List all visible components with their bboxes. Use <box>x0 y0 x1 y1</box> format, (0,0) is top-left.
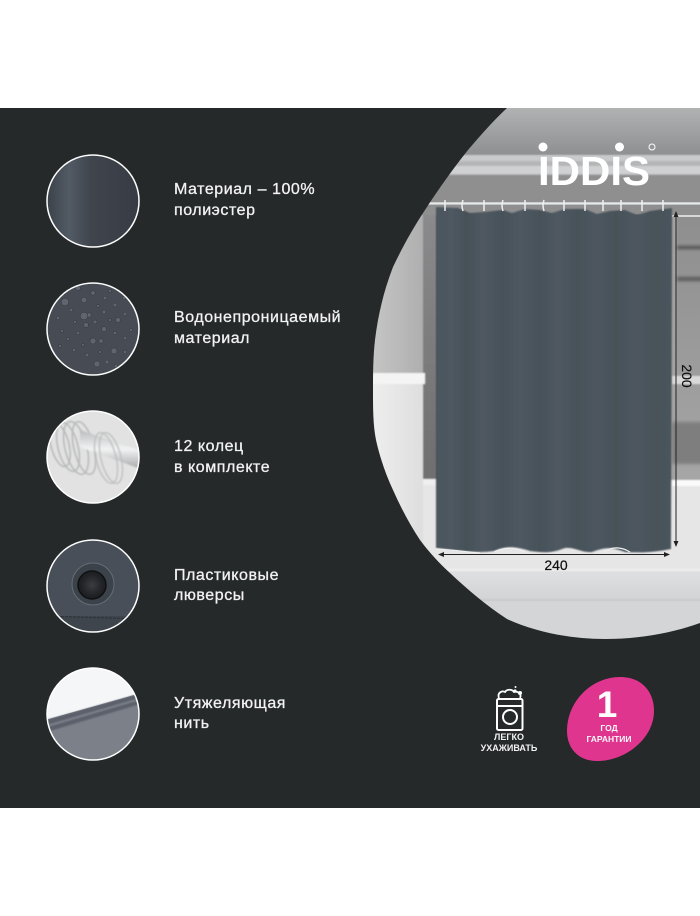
circle: fabric swatch <box>47 155 139 247</box>
circle: rings on rod <box>46 411 142 503</box>
text: easy care: ЛЕГКО <box>494 732 524 742</box>
badge: easy care <box>481 686 538 753</box>
dark background panel <box>0 108 700 808</box>
product photo: curtain in bathroom <box>365 104 700 645</box>
circle: weighted hem <box>45 668 145 765</box>
dimension: width 240 <box>438 552 670 573</box>
icon: washing machine <box>497 686 522 730</box>
dimension: height 200 <box>674 211 695 547</box>
text: material: Материал – 100% <box>174 181 315 198</box>
pink blob <box>567 677 654 761</box>
feature 3: rings <box>46 411 270 503</box>
text: grommets: Пластиковые <box>174 567 279 584</box>
text: weighted thread: нить <box>174 715 210 732</box>
curtain hem highlight <box>436 548 630 553</box>
feature 5: weighted thread <box>45 668 286 765</box>
badge: 1 year warranty <box>567 677 654 761</box>
curtain rings <box>445 200 663 211</box>
text: grommets: люверсы <box>174 587 245 604</box>
logo: IDDIS: IDDIS <box>538 148 650 194</box>
feature 4: grommets <box>40 540 279 636</box>
feature 2: waterproof <box>47 283 341 375</box>
feature 1: material <box>47 155 315 247</box>
circle: plastic grommet <box>46 539 140 633</box>
text: material: полиэстер <box>174 202 256 219</box>
text: weighted thread: Утяжеляющая <box>174 695 286 712</box>
warranty text: ГАРАНТИИ <box>586 734 632 744</box>
text: waterproof: материал <box>174 330 250 347</box>
dimension: width 240: 240 <box>544 557 568 573</box>
text: rings: в комплекте <box>174 459 270 476</box>
text: easy care: УХАЖИВАТЬ <box>481 743 538 753</box>
circle: water droplets <box>47 283 139 375</box>
dimension: height 200: 200 <box>679 364 695 388</box>
curtain rods <box>428 202 700 217</box>
warranty text: ГОД <box>600 723 618 733</box>
text: waterproof: Водонепроницаемый <box>174 309 341 326</box>
text: rings: 12 колец <box>174 438 244 455</box>
warranty number: 1 <box>597 684 617 725</box>
curtain fabric <box>436 207 672 552</box>
